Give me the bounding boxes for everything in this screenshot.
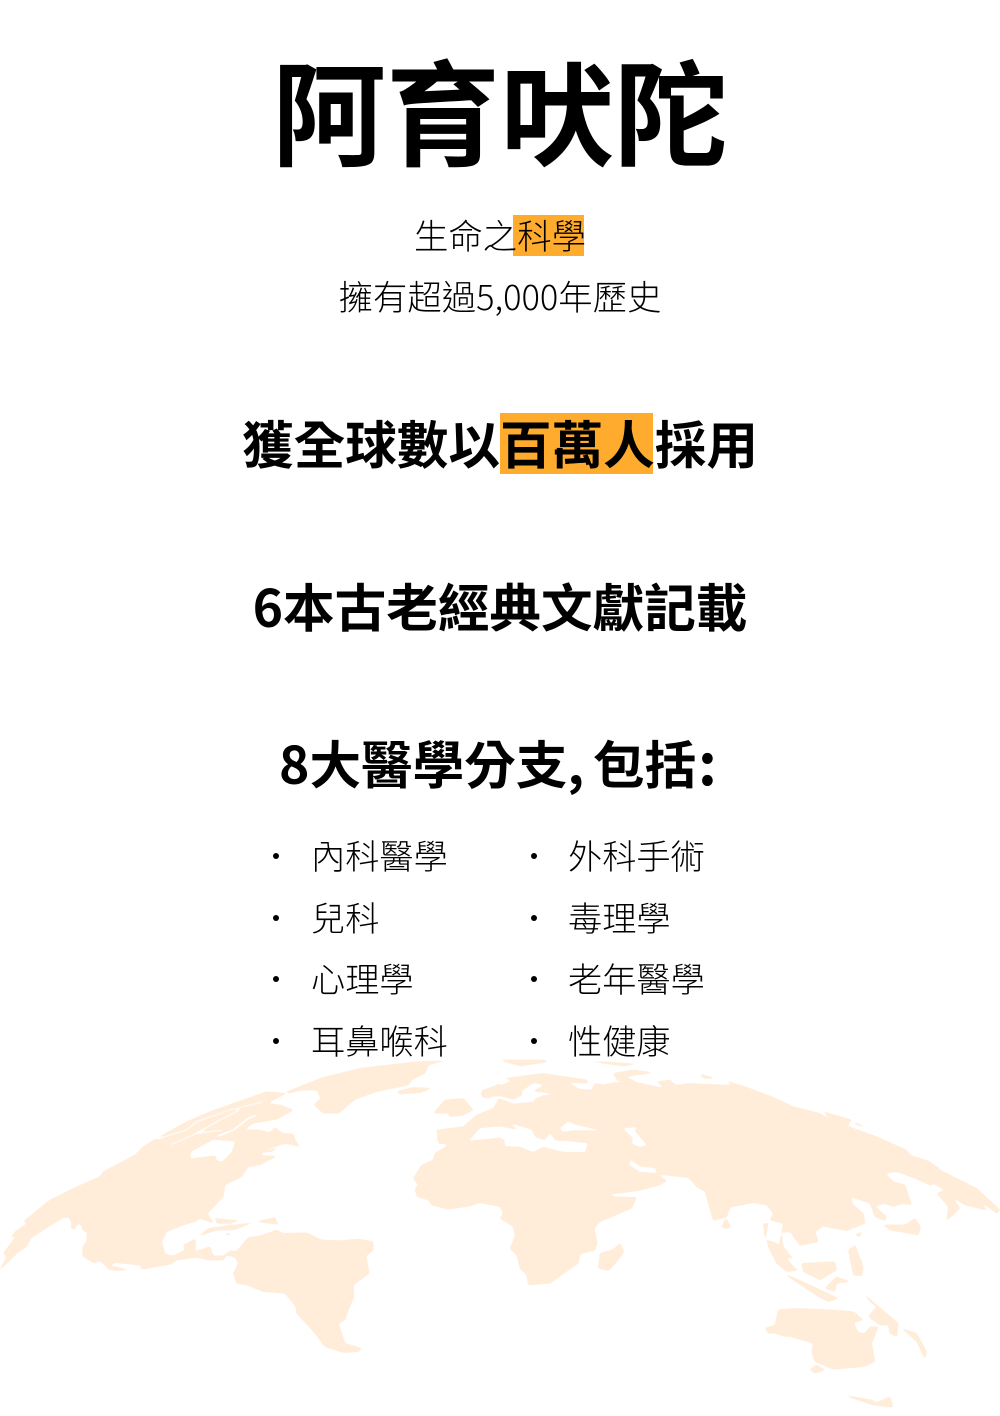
list text: 內科醫學 <box>311 829 448 879</box>
list item <box>531 915 537 921</box>
list text: 性健康 <box>568 1014 671 1064</box>
subtitle line one with highlight: 生命之科學 <box>414 209 586 259</box>
list text: 老年醫學 <box>568 952 705 1002</box>
map: caribbean islands <box>199 1217 283 1236</box>
map: japan <box>883 1218 921 1235</box>
map: southeast asia islands <box>763 1223 863 1302</box>
list text: 心理學 <box>311 952 414 1002</box>
heading: global adoption with highlight: 獲全球數以百萬人採用 <box>242 404 758 479</box>
list text: 耳鼻喉科 <box>311 1014 448 1064</box>
list item <box>531 853 537 859</box>
heading: eight branches: 8大醫學分支, 包括 <box>279 724 696 799</box>
subtitle line two: 擁有超過5,000年歷史 <box>339 270 661 320</box>
map: new zealand <box>843 1395 893 1407</box>
list item <box>531 1038 537 1044</box>
map: sri lanka <box>722 1218 731 1229</box>
list text: 毒理學 <box>568 891 671 941</box>
heading: eight branches: : <box>698 718 717 802</box>
map: new guinea <box>863 1293 902 1339</box>
list item <box>273 915 279 921</box>
list item <box>273 853 279 859</box>
list item <box>273 1038 279 1044</box>
list item <box>273 976 279 982</box>
map: americas and greenland <box>0 1061 473 1353</box>
list text: 兒科 <box>311 891 379 941</box>
map: madagascar <box>598 1243 624 1271</box>
list text: 外科手術 <box>568 829 705 879</box>
title: 阿育吠陀 <box>272 25 728 190</box>
heading: ancient texts: 6本古老經典文獻記載 <box>253 567 747 642</box>
list item <box>531 976 537 982</box>
list: eight branches of medicine <box>273 829 705 1064</box>
map: australia <box>765 1308 878 1369</box>
map: eurasia, africa and oceania <box>413 1060 1000 1407</box>
